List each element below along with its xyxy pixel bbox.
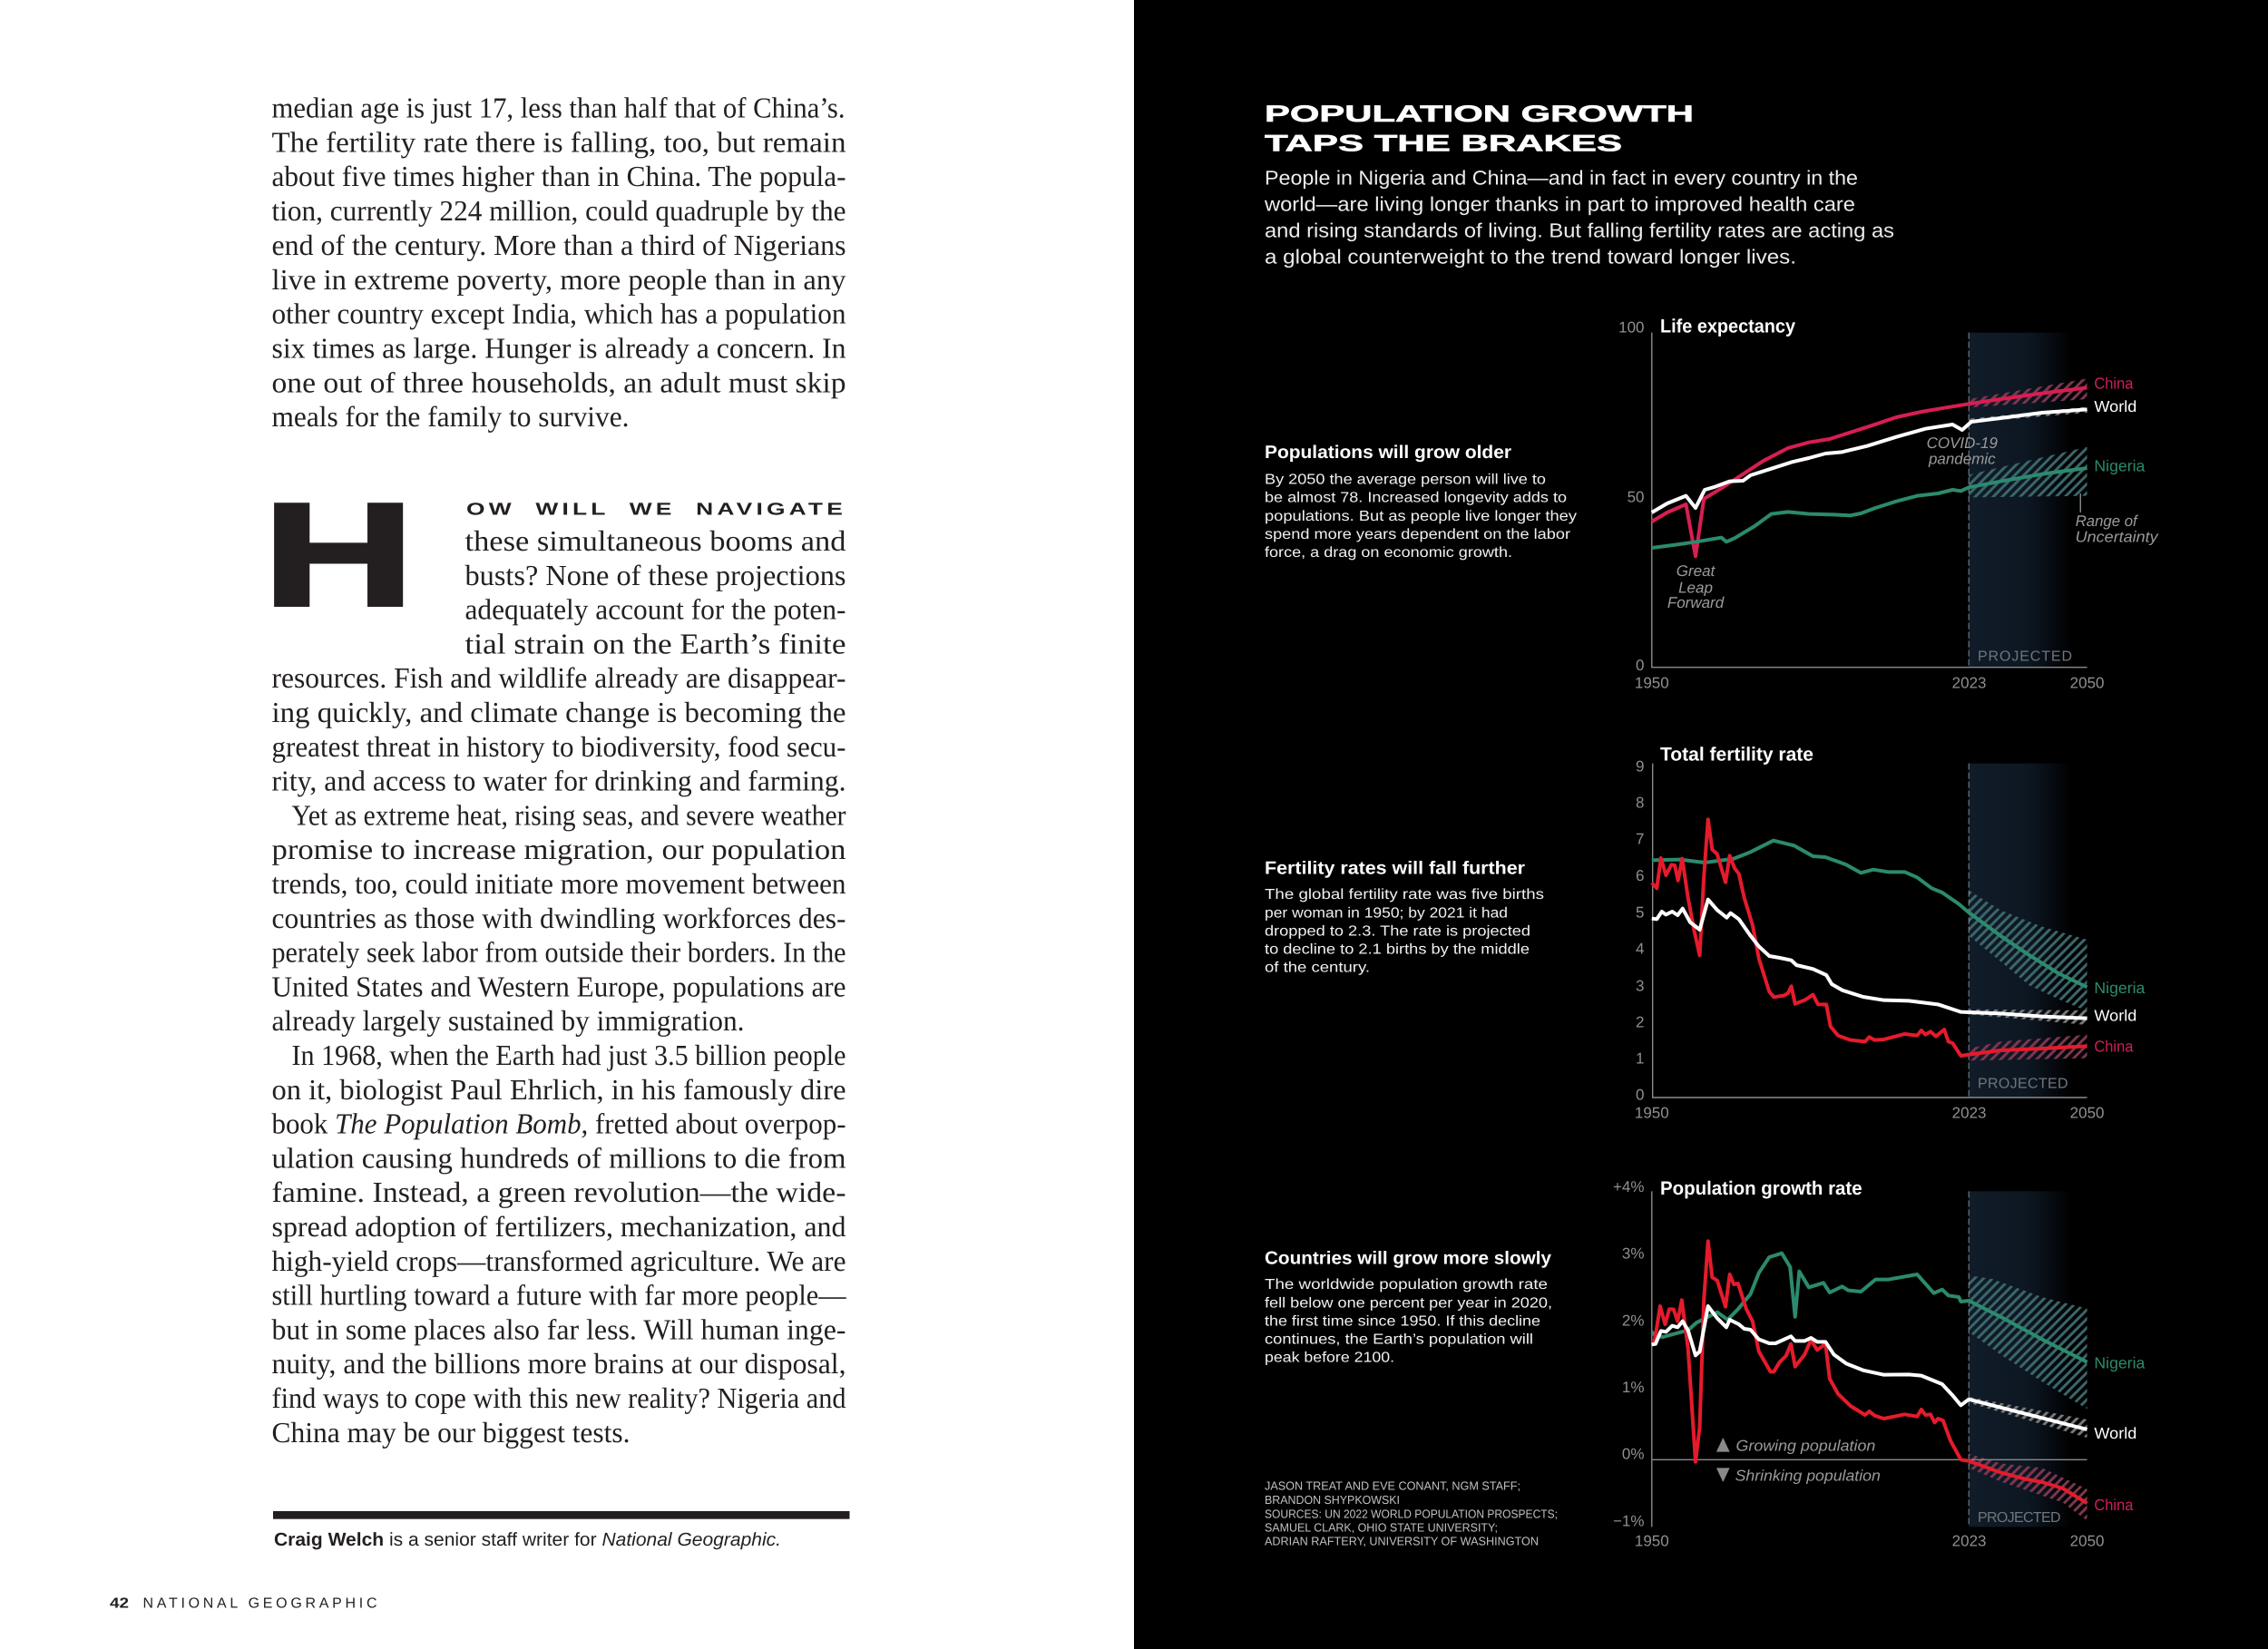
article text: main body: famine. Instead, a green revolution—the wide- (272, 1176, 846, 1208)
caption: fertility rates will fall further: per woman in 1950; by 2021 it had (1265, 906, 1508, 922)
article text: section lead-in: OW WILL WE NAVIGATE (466, 501, 846, 519)
fertility axis labels: 5 (1636, 904, 1644, 922)
fertility axis labels: 9 (1636, 758, 1644, 776)
article text: main body: trends, too, could initiate more movement between (272, 867, 846, 900)
fertility axis labels: 6 (1636, 867, 1644, 884)
life expectancy series labels: China (2094, 374, 2134, 392)
caption: populations will grow older (1265, 443, 1577, 561)
credits and sources: SAMUEL CLARK, OHIO STATE UNIVERSITY; (1265, 1520, 1498, 1534)
growth rate axis labels: 2% (1622, 1312, 1644, 1330)
life expectancy annotations: Leap (1678, 579, 1713, 596)
growth rate series labels: Nigeria (2094, 1353, 2146, 1371)
article text: main body: In 1968, when the Earth had just 3.5 billion people (292, 1039, 846, 1071)
article text: main body: nuity, and the billions more brains at our disposal, (272, 1347, 846, 1380)
article text: main body: perately seek labor from outside their borders. In the (272, 936, 846, 969)
article text: main body: find ways to cope with this new reality? Nigeria and (272, 1381, 846, 1414)
infographic intro text: and rising standards of living. But falling fertility rates are acting as (1265, 220, 1894, 242)
infographic title (1265, 102, 1694, 157)
article text: opening paragraph: median age is just 17, less than half that of China’s. (272, 91, 846, 123)
credits and sources: JASON TREAT AND EVE CONANT, NGM STAFF; (1265, 1479, 1520, 1493)
caption: countries will grow more slowly: fell below one percent per year in 2020, (1265, 1296, 1552, 1312)
article text: main body: countries as those with dwindling workforces des- (272, 902, 846, 934)
article text: main body: but in some places also far less. Will human inge- (272, 1312, 846, 1345)
fertility axis labels: 1 (1636, 1050, 1644, 1068)
article text: main body: China may be our biggest tests. (272, 1416, 630, 1449)
life expectancy axis labels: 2050 (2070, 674, 2105, 691)
growth rate axis labels: 0% (1622, 1445, 1644, 1462)
caption: populations will grow older: By 2050 the average person will live to (1265, 472, 1546, 487)
article text: main body: high-yield crops—transformed agriculture. We are (272, 1244, 846, 1277)
life expectancy axis labels (1618, 319, 2105, 691)
caption: populations will grow older: populations. But as people live longer they (1265, 509, 1577, 524)
article text: main body: book The Population Bomb, fretted about overpop- (272, 1107, 846, 1140)
credits and sources: SOURCES: UN 2022 WORLD POPULATION PROSPECTS; (1265, 1507, 1558, 1520)
fertility axis labels: 8 (1636, 795, 1644, 812)
caption: fertility rates will fall further: The global fertility rate was five births (1265, 887, 1544, 903)
infographic intro text (1264, 166, 1894, 268)
life expectancy annotations: Forward (1667, 594, 1725, 611)
caption: fertility rates will fall further: of the century. (1265, 961, 1370, 976)
caption: populations will grow older: force, a drag on economic growth. (1265, 545, 1512, 561)
article text: main body: ulation causing hundreds of millions to die from (272, 1141, 846, 1174)
article text: opening paragraph: about five times higher than in China. The popula- (272, 160, 846, 192)
fertility axis labels: 3 (1636, 977, 1644, 994)
life expectancy series labels: World (2094, 397, 2136, 415)
growth rate heading: Population growth rate (1660, 1178, 1862, 1199)
credits and sources (1265, 1479, 1558, 1547)
article text: main body: these simultaneous booms and (464, 524, 846, 557)
caption: countries will grow more slowly: the first time since 1950. If this decline (1265, 1314, 1540, 1330)
fertility axis labels: 2 (1636, 1013, 1644, 1030)
page folio: 42 (110, 1596, 129, 1612)
growth rate axis labels: +4% (1613, 1178, 1644, 1195)
life expectancy series labels (2094, 374, 2146, 474)
article text: main body: spread adoption of fertilizers, mechanization, and (272, 1210, 846, 1243)
fertility axis labels: 1950 (1635, 1105, 1669, 1122)
fertility axis labels: 4 (1636, 941, 1644, 958)
fertility axis labels: 0 (1636, 1087, 1644, 1104)
growing and shrinking legend: Shrinking population (1735, 1468, 1881, 1485)
life expectancy axis labels: 50 (1628, 488, 1644, 505)
caption: fertility rates will fall further: to decline to 2.1 births by the middle (1265, 942, 1530, 958)
article text: opening paragraph: live in extreme poverty, more people than in any (272, 263, 846, 296)
chart: population growth rate (1613, 1178, 2146, 1549)
article text: main body: United States and Western Europe, populations are (272, 970, 846, 1002)
article text: main body: adequately account for the poten- (464, 593, 846, 626)
growth rate plot (1652, 1191, 2087, 1527)
article text: main body: rity, and access to water for drinking and farming. (272, 765, 846, 797)
author byline: Craig Welch is a senior staff writer for National Geographic. (274, 1529, 781, 1550)
article text: main body: greatest threat in history to biodiversity, food secu- (272, 730, 846, 763)
caption: populations will grow older: spend more years dependent on the labor (1265, 527, 1571, 542)
life expectancy axis labels: 2023 (1952, 674, 1987, 691)
growing and shrinking legend: Growing population (1736, 1437, 1875, 1454)
caption: fertility rates will fall further: Fertility rates will fall further (1265, 858, 1525, 878)
panel: white article page (0, 0, 1134, 1649)
life expectancy axis labels: 100 (1618, 319, 1644, 337)
caption: populations will grow older: Populations will grow older (1265, 443, 1511, 463)
fertility series labels: China (2094, 1037, 2134, 1055)
article text: main body: ing quickly, and climate change is becoming the (272, 696, 846, 728)
author rule (273, 1511, 849, 1519)
chart: total fertility rate (1635, 744, 2146, 1122)
growth rate axis labels: 2023 (1952, 1532, 1987, 1549)
life expectancy heading: Life expectancy (1660, 317, 1795, 337)
article text: opening paragraph (272, 91, 846, 433)
life expectancy annotations (1667, 434, 2159, 664)
page folio: NATIONAL GEOGRAPHIC (143, 1596, 377, 1612)
article text: opening paragraph: one out of three households, an adult must skip (272, 366, 846, 398)
caption: countries will grow more slowly: peak before 2100. (1265, 1351, 1394, 1366)
infographic intro text: world—are living longer thanks in part to improved health care (1264, 193, 1855, 216)
article text: main body (272, 524, 846, 1449)
article text: main body: promise to increase migration, our population (272, 833, 846, 865)
article text: opening paragraph: The fertility rate there is falling, too, but remain (272, 125, 846, 158)
caption: countries will grow more slowly: The worldwide population growth rate (1265, 1277, 1548, 1293)
article text: main body: on it, biologist Paul Ehrlich, in his famously dire (272, 1073, 846, 1106)
growth rate series labels: China (2094, 1496, 2134, 1514)
growth rate series labels: PROJECTED (1978, 1510, 2061, 1526)
panel: black infographic page (1134, 0, 2268, 1649)
growth rate axis labels: 3% (1622, 1245, 1644, 1263)
credits and sources: ADRIAN RAFTERY, UNIVERSITY OF WASHINGTON (1265, 1534, 1539, 1547)
caption: fertility rates will fall further: dropped to 2.3. The rate is projected (1265, 924, 1530, 940)
infographic title: TAPS THE BRAKES (1265, 132, 1622, 157)
fertility axis labels (1635, 758, 2105, 1122)
drop cap H: H (263, 473, 415, 637)
article text: main body: Yet as extreme heat, rising seas, and severe weather (292, 798, 846, 831)
caption: countries will grow more slowly: Countries will grow more slowly (1265, 1248, 1552, 1268)
growth rate axis labels: −1% (1613, 1513, 1644, 1530)
fertility series labels: World (2094, 1007, 2136, 1025)
article text: main body: tial strain on the Earth’s finite (464, 627, 846, 659)
fertility axis labels: 2050 (2070, 1105, 2105, 1122)
growth rate axis labels (1613, 1178, 2105, 1549)
chart: life expectancy (1618, 317, 2159, 691)
life expectancy annotations: PROJECTED (1978, 649, 2072, 664)
infographic title: POPULATION GROWTH (1265, 102, 1694, 127)
credits and sources: BRANDON SHYPKOWSKI (1265, 1493, 1400, 1507)
growth rate series labels (1978, 1353, 2146, 1526)
life expectancy axis labels: 0 (1636, 657, 1644, 674)
fertility axis labels: 7 (1636, 831, 1644, 848)
infographic intro text: a global counterweight to the trend toward longer lives. (1265, 246, 1796, 268)
fertility series labels (1978, 979, 2146, 1091)
life expectancy axis labels: 1950 (1635, 674, 1669, 691)
life expectancy annotations: Uncertainty (2076, 529, 2159, 546)
article text: main body: busts? None of these projections (464, 559, 846, 591)
fertility axis labels: 2023 (1952, 1105, 1987, 1122)
life expectancy plot (1652, 333, 2087, 668)
article text: opening paragraph: six times as large. Hunger is already a concern. In (272, 332, 846, 365)
growth rate axis labels: 1% (1622, 1379, 1644, 1396)
article text: opening paragraph: other country except India, which has a population (272, 298, 846, 330)
growth rate axis labels: 2050 (2070, 1532, 2105, 1549)
article text: main body: already largely sustained by immigration. (272, 1004, 744, 1037)
caption: countries will grow more slowly: continues, the Earth’s population will (1265, 1332, 1533, 1348)
caption: countries will grow more slowly (1265, 1248, 1552, 1366)
article text: opening paragraph: meals for the family to survive. (272, 400, 630, 433)
life expectancy annotations: Great (1677, 562, 1716, 580)
growing and shrinking legend (1735, 1437, 1881, 1485)
article text: main body: still hurtling toward a future with far more people— (272, 1279, 846, 1312)
article text: main body: resources. Fish and wildlife already are disappear- (272, 661, 846, 694)
caption: fertility rates will fall further (1265, 858, 1544, 976)
fertility plot (1652, 764, 2087, 1098)
life expectancy annotations: pandemic (1928, 451, 1996, 468)
fertility series labels: Nigeria (2094, 979, 2146, 997)
fertility series labels: PROJECTED (1978, 1076, 2068, 1091)
article text: opening paragraph: tion, currently 224 million, could quadruple by the (272, 194, 846, 227)
life expectancy series labels: Nigeria (2094, 456, 2146, 474)
life expectancy annotations: Range of (2076, 512, 2139, 530)
caption: populations will grow older: be almost 78. Increased longevity adds to (1265, 490, 1567, 505)
life expectancy annotations: COVID-19 (1927, 434, 1999, 452)
fertility heading: Total fertility rate (1660, 744, 1813, 765)
infographic intro text: People in Nigeria and China—and in fact in every country in the (1265, 166, 1858, 189)
growth rate axis labels: 1950 (1635, 1532, 1669, 1549)
article text: opening paragraph: end of the century. More than a third of Nigerians (272, 229, 846, 261)
growth rate series labels: World (2094, 1424, 2136, 1442)
